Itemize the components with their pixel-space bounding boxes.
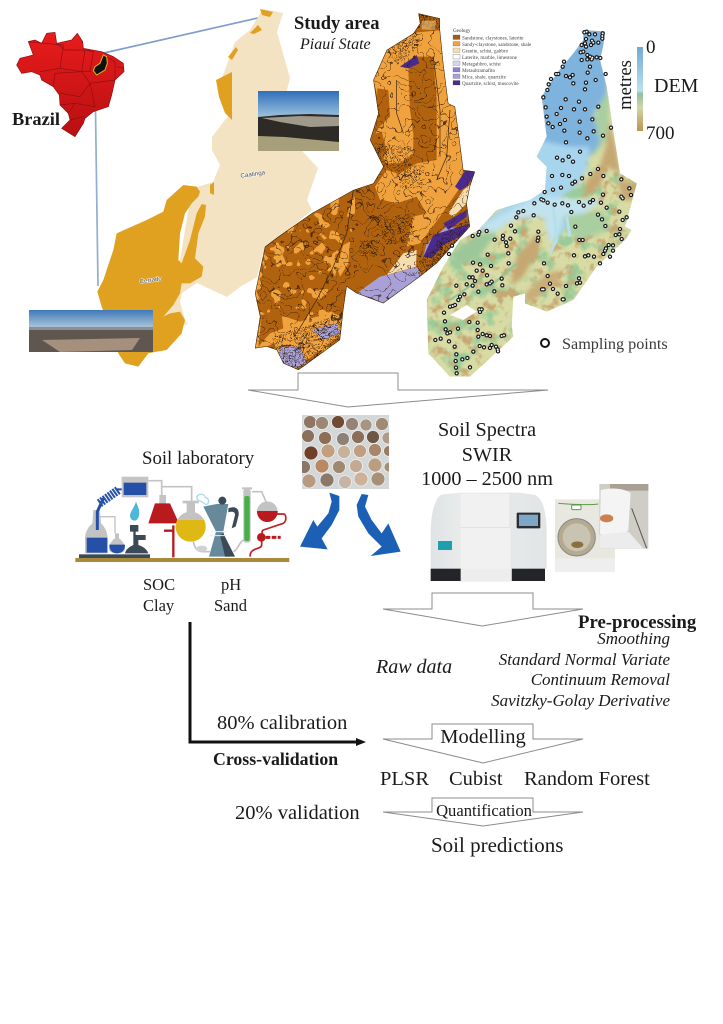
block arrow: spectra to raw data xyxy=(383,593,583,626)
label: Caatinga: Caatinga xyxy=(240,169,266,180)
label: Soil predictions: Soil predictions xyxy=(431,833,563,857)
geology legend: Laterite, marble, limestone xyxy=(462,55,518,61)
connector line: Brazil to study area xyxy=(95,17,262,286)
photo: soil sample tray xyxy=(302,415,389,489)
heading: Pre-processing: Pre-processing xyxy=(578,612,697,633)
label: Brazil: Brazil xyxy=(12,109,60,129)
pre-processing methods: Standard Normal Variate xyxy=(499,650,670,669)
geology legend: Mica, shale, quartzite xyxy=(462,74,507,80)
icon: curved blue arrow to laboratory xyxy=(300,493,339,549)
DEM map with sampling points xyxy=(423,27,643,380)
soil properties: SOC, Clay, pH, Sand: Sand xyxy=(214,596,248,615)
Piauí highlight on Brazil map xyxy=(93,55,107,75)
label: Raw data: Raw data xyxy=(375,656,452,678)
pre-processing methods xyxy=(491,629,670,710)
model names xyxy=(380,768,650,790)
DEM scale labels xyxy=(615,37,699,144)
heading: Soil Spectra SWIR: 1000 – 2500 nm xyxy=(421,468,553,490)
model names: Cubist xyxy=(449,768,503,790)
block arrow: map to soil samples xyxy=(248,373,548,407)
geology legend: Sandstone, claystones, laterite xyxy=(462,36,524,42)
block arrow: Modelling: Modelling xyxy=(440,726,526,748)
label: 20% validation: 20% validation xyxy=(235,802,360,824)
soil properties: SOC, Clay, pH, Sand: SOC xyxy=(143,575,175,594)
illustration: laboratory glassware xyxy=(75,477,289,562)
geology map xyxy=(250,10,480,373)
soil properties: SOC, Clay, pH, Sand: Clay xyxy=(143,596,175,615)
geology legend: Granite, schist, gabbro xyxy=(462,48,509,54)
label: Cross-validation: Cross-validation xyxy=(213,749,338,769)
Brazil map xyxy=(17,32,124,137)
model names: Random Forest xyxy=(524,768,650,790)
biome map: Caatinga and Cerrado xyxy=(97,9,318,367)
model names: PLSR xyxy=(380,768,429,790)
heading: Soil Spectra SWIR: SWIR xyxy=(462,444,513,466)
geology legend: Metaultramafito xyxy=(462,67,496,74)
photo: sample lid xyxy=(599,484,648,549)
geology legend: Geology xyxy=(453,28,471,34)
geology legend: Quartzite, schist, muscovite xyxy=(462,81,519,87)
photo: Cerrado landscape xyxy=(29,310,153,352)
illustration: spectrometer xyxy=(431,493,547,582)
DEM scale labels: 0 xyxy=(646,37,656,58)
photo: sample holder xyxy=(555,499,615,572)
DEM scale labels: DEM xyxy=(654,75,699,97)
sampling point markers xyxy=(435,32,631,373)
arrow: laboratory data to modelling xyxy=(190,622,366,746)
DEM scale labels: 700 xyxy=(646,123,674,144)
DEM colour bar xyxy=(637,47,643,131)
label: Cerrado: Cerrado xyxy=(139,275,163,286)
label: 80% calibration: 80% calibration xyxy=(217,712,347,734)
soil properties: SOC, Clay, pH, Sand: pH xyxy=(221,575,241,594)
block arrow: Quantification xyxy=(383,798,583,826)
heading: Soil laboratory: Soil laboratory xyxy=(142,448,255,469)
block arrow: Modelling xyxy=(383,724,583,763)
DEM scale labels: metres xyxy=(615,60,636,110)
geology legend: Sandy-claystone, sandstone, shale xyxy=(462,42,532,48)
pre-processing methods: Continuum Removal xyxy=(531,670,670,689)
heading: Soil Spectra SWIR: Soil Spectra xyxy=(438,419,536,441)
pre-processing methods: Smoothing xyxy=(597,629,670,648)
subheading: Piauí State: Piauí State xyxy=(299,36,371,53)
heading: Study area: Study area xyxy=(294,14,380,34)
block arrow: Quantification: Quantification xyxy=(436,801,533,820)
heading: Soil Spectra SWIR xyxy=(421,419,553,490)
soil properties: SOC, Clay, pH, Sand xyxy=(143,575,248,615)
legend: sampling points: Sampling points xyxy=(562,335,668,353)
geology legend xyxy=(453,28,532,87)
photo: Caatinga landscape xyxy=(258,91,339,151)
geology legend: Metagabbro, schist xyxy=(462,62,501,68)
icon: curved blue arrow to spectrometer xyxy=(357,494,401,556)
pre-processing methods: Savitzky-Golay Derivative xyxy=(491,691,670,710)
